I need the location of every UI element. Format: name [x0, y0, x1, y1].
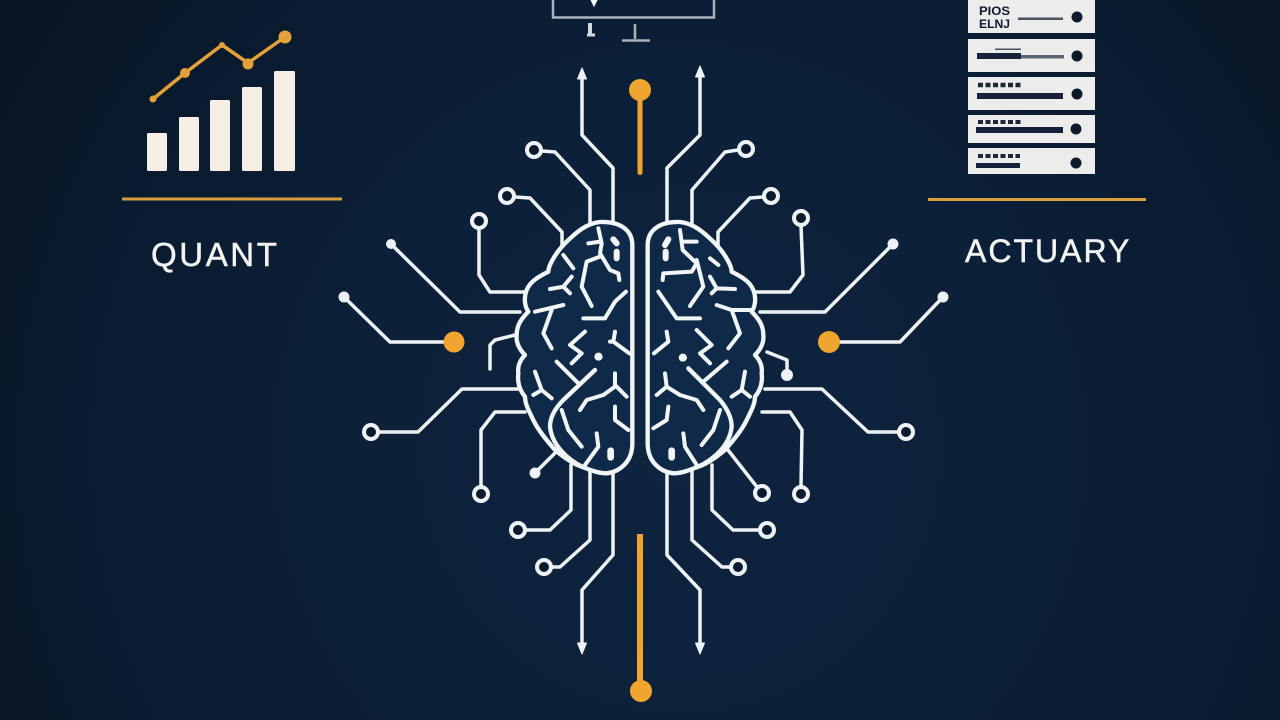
server unit 5	[968, 148, 1095, 174]
divider: quant	[122, 198, 342, 200]
icon: monitor	[553, 0, 714, 40]
server unit 1	[968, 0, 1095, 33]
divider: actuary	[928, 198, 1146, 201]
server unit 4	[968, 115, 1095, 143]
icon: server stack	[968, 0, 1095, 174]
orange nodes	[444, 79, 840, 702]
terminals: right	[696, 66, 946, 654]
right hemisphere	[648, 222, 763, 473]
server unit 2	[968, 39, 1095, 72]
folds	[653, 230, 750, 465]
circuit lines: right	[667, 66, 946, 654]
bars	[147, 71, 295, 171]
terminals: left	[340, 68, 586, 654]
label: QUANT: QUANT	[151, 236, 280, 273]
brain	[517, 222, 763, 473]
server unit 1: ELNJ	[979, 17, 1010, 31]
label: ACTUARY: ACTUARY	[965, 233, 1131, 269]
server unit 3	[968, 77, 1095, 110]
trend line	[150, 30, 292, 102]
server unit 1: PIOS	[979, 4, 1010, 18]
icon: growth chart	[147, 30, 295, 171]
left hemisphere	[517, 222, 632, 473]
circuit lines: left	[340, 68, 613, 654]
folds	[533, 228, 629, 465]
